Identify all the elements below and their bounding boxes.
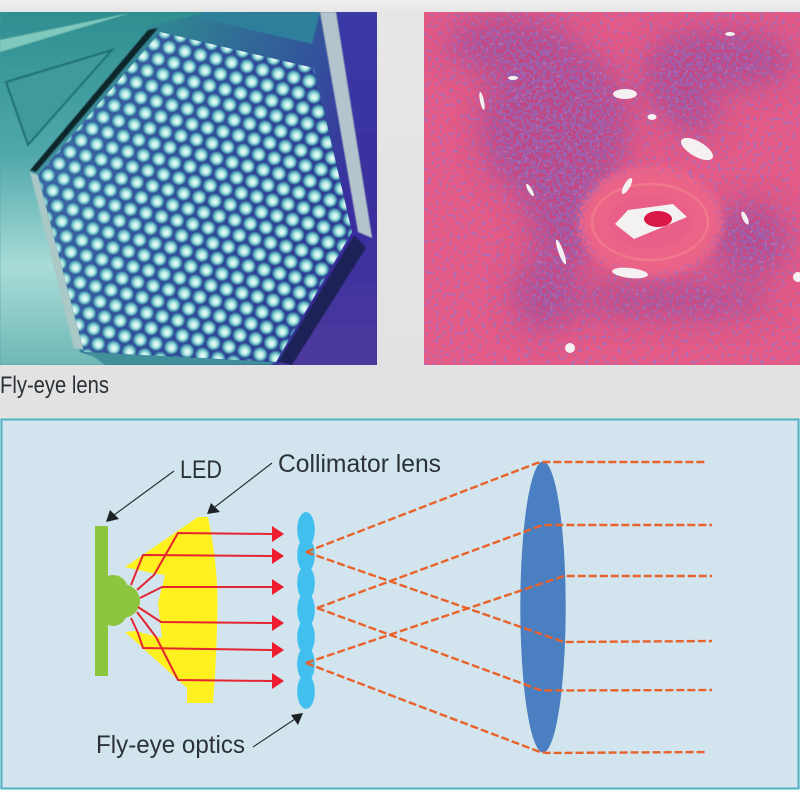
- lenslet array: [30, 20, 360, 365]
- fly-eye optics: [297, 512, 315, 709]
- LED: [95, 526, 140, 676]
- vessel lumen: [615, 204, 687, 239]
- white voids: [478, 32, 800, 353]
- label: Fly-eye optics: [96, 713, 303, 759]
- blood clot: [644, 211, 672, 227]
- label: LED: LED: [180, 456, 222, 484]
- label: Collimator lens: [207, 450, 441, 514]
- panel: optics diagram: [2, 420, 798, 788]
- collimator lens: [125, 517, 218, 703]
- photo: stained tissue micrograph: [424, 12, 800, 365]
- label: LED: [106, 456, 222, 522]
- vessel wall: [576, 166, 724, 278]
- dashed orange light paths: [306, 462, 712, 753]
- red light rays: [131, 533, 272, 681]
- large condenser lens: [520, 462, 566, 752]
- label: Collimator lens: Collimator lens: [278, 450, 441, 478]
- caption: Fly-eye lens: Fly-eye lens: [0, 372, 109, 399]
- white strip below panel: [0, 789, 800, 800]
- red arrowheads: [272, 526, 284, 689]
- label: Fly-eye optics: Fly-eye optics: [96, 731, 245, 759]
- photo: fly-eye lens: [0, 12, 377, 365]
